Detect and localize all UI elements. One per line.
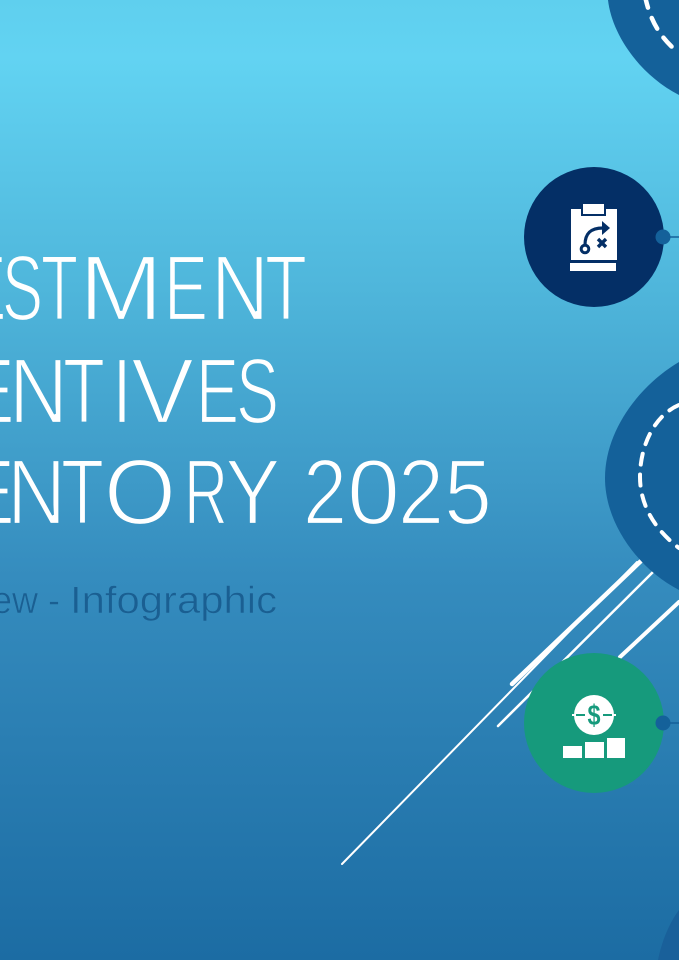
title: T [63,339,105,443]
icon: navy circle with strategy clipboard [524,167,670,307]
title [0,236,492,544]
title: O [104,440,176,544]
road blob: middle right [605,362,679,590]
title: N [9,339,68,443]
icon: green circle with dollar growth [524,653,670,793]
title: T [265,236,307,340]
connector: navy circle [663,236,679,238]
title: S [236,339,279,443]
title: 5 [444,440,492,544]
diagonal white lines [342,560,679,864]
title: M [79,236,163,340]
title: T [41,236,78,340]
title: N [211,236,269,340]
title: 2 [398,440,444,544]
title: 2 [303,440,347,544]
title: E [164,236,208,340]
title: T [61,440,104,544]
title: S [2,236,43,340]
title: 0 [347,440,400,544]
title: V [131,339,194,443]
connector: green circle [663,722,679,724]
title: I [112,339,132,443]
title: N [7,440,66,544]
title: Y [225,440,279,544]
road blob: bottom right [658,910,679,960]
icon: green circle with dollar growth: $ [588,700,600,732]
subtitle: Infographic [70,580,277,622]
title: E [196,339,239,443]
road blob: top right [608,0,679,95]
title: R [184,440,228,544]
